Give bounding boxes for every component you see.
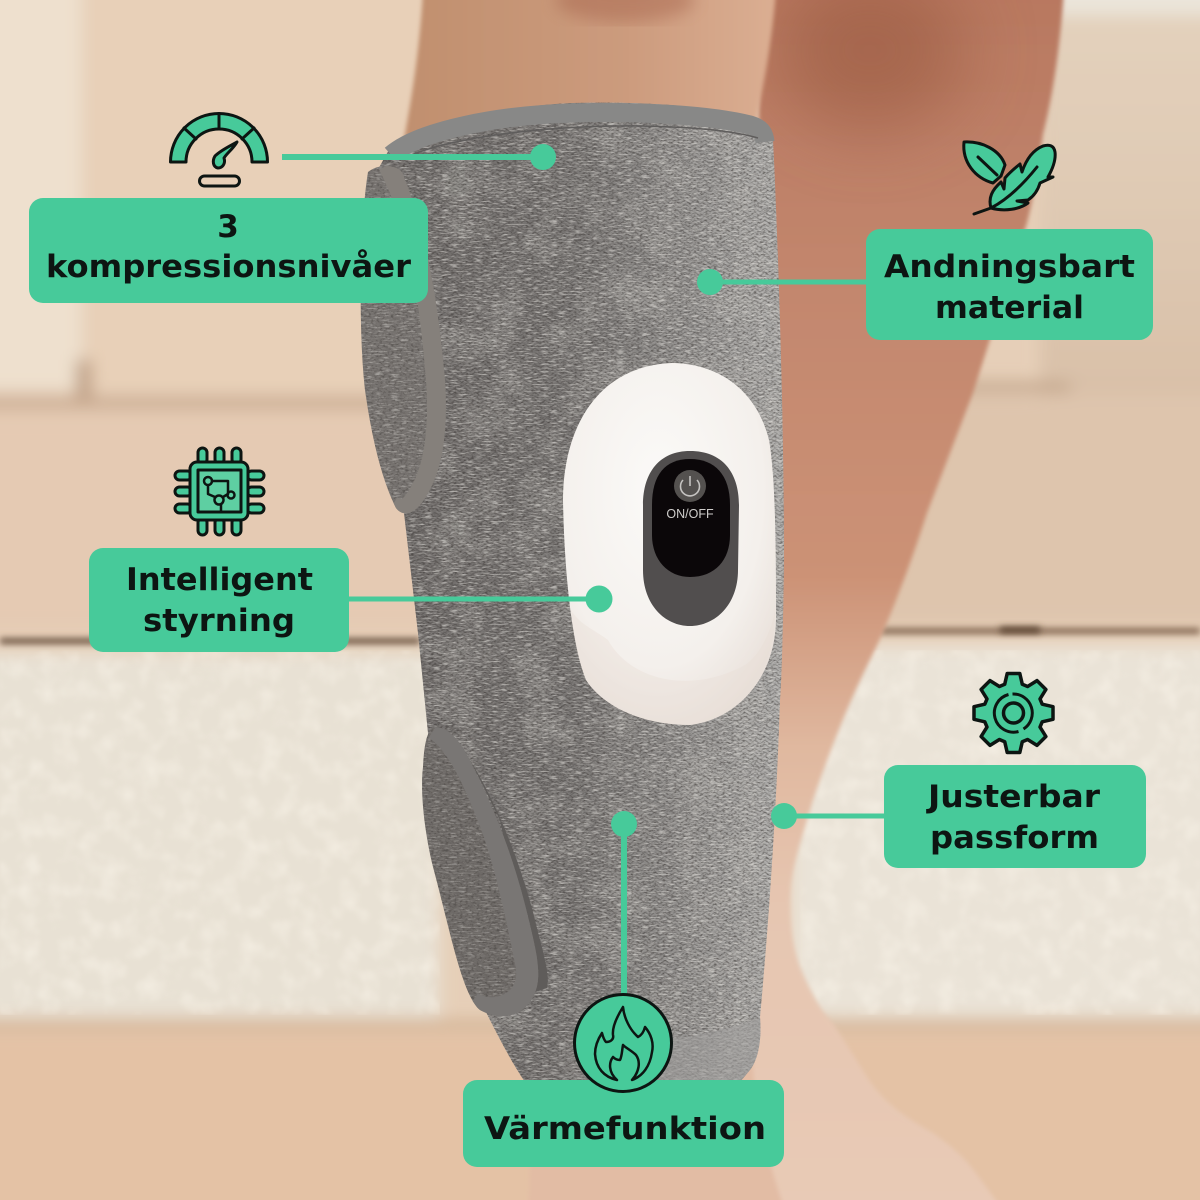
label text: passform	[930, 820, 1099, 856]
callout: intelligent styrning	[89, 548, 612, 652]
callout: justerbar passform	[771, 765, 1146, 868]
label text: 3	[217, 209, 239, 245]
label text: Andningsbart	[884, 249, 1135, 285]
connector line	[282, 154, 543, 160]
power button	[674, 470, 706, 502]
lower leg skin below sleeve	[525, 1060, 785, 1200]
display screen	[652, 459, 730, 577]
on/off label: ON/OFF	[666, 507, 714, 521]
label text: Intelligent	[126, 562, 313, 598]
control unit	[563, 363, 776, 725]
connector dot	[530, 144, 556, 170]
label text: Värmefunktion	[484, 1111, 766, 1147]
icon: circuit chip	[175, 448, 264, 535]
compression sleeve	[350, 95, 800, 1090]
label text: Justerbar	[926, 779, 1101, 815]
icon: flame in circle	[574, 994, 672, 1092]
connector line	[621, 824, 627, 1000]
label box	[866, 229, 1153, 340]
connector dot	[611, 811, 637, 837]
connector line	[349, 596, 599, 602]
sleeve ankle roll	[657, 1018, 760, 1080]
icon: leaf and feather	[964, 142, 1055, 214]
connector line	[710, 280, 868, 284]
upper strap	[360, 166, 446, 514]
connector line	[784, 814, 886, 818]
back leg	[745, 0, 1064, 1200]
display bezel	[643, 451, 739, 626]
label text: kompressionsnivåer	[46, 249, 412, 285]
icon: gear	[974, 674, 1053, 752]
label text: styrning	[143, 603, 295, 639]
label text: material	[935, 290, 1084, 326]
sleeve top binding	[391, 112, 765, 155]
connector dot	[586, 586, 612, 612]
label box	[29, 198, 428, 303]
label box	[884, 765, 1146, 868]
label box	[463, 1080, 784, 1167]
callout: andningsbart material	[697, 229, 1153, 340]
callout: värmefunktion	[463, 811, 784, 1167]
connector dot	[771, 803, 797, 829]
front leg skin	[400, 0, 776, 160]
label box	[89, 548, 349, 652]
lower strap	[422, 728, 548, 1016]
callout: 3 kompressionsnivåer	[29, 144, 556, 303]
device body	[563, 363, 776, 725]
connector dot	[697, 269, 723, 295]
icon: speedometer	[170, 114, 268, 186]
